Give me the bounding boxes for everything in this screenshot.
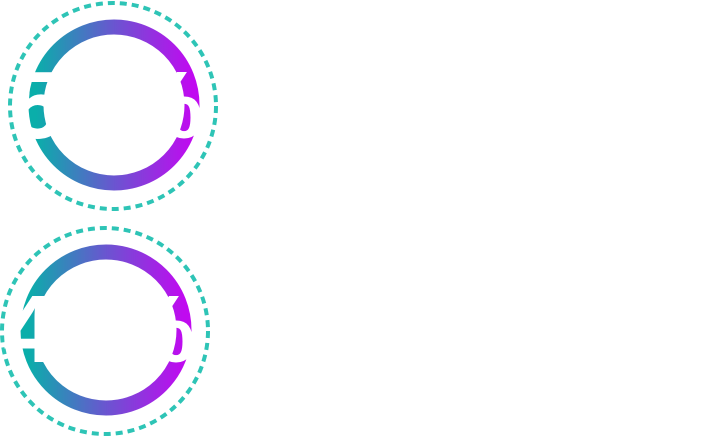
value 50%: 50% bbox=[11, 52, 203, 159]
stat 2: 40% bbox=[2, 228, 208, 434]
gradient ring 1 bbox=[36, 27, 192, 183]
stat 1: 50% bbox=[10, 3, 216, 209]
dotted outer circle 1 bbox=[10, 3, 216, 209]
value 40%: 40% bbox=[3, 276, 195, 383]
gradient ring 2 bbox=[28, 252, 184, 408]
dotted outer circle 2 bbox=[2, 228, 208, 434]
